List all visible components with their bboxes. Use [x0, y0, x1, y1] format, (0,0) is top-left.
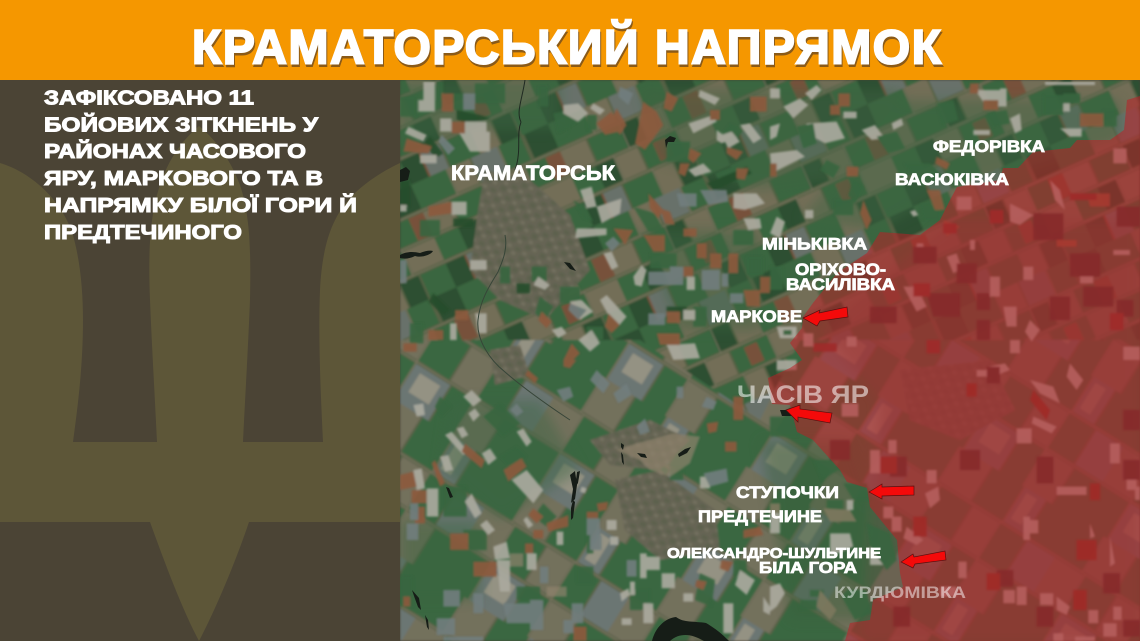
text block: summary: РАЙОНАХ ЧАСОВОГО [44, 139, 306, 163]
map: satellite terrain with occupied zone [400, 80, 1140, 641]
map labels: settlements: БІЛА ГОРА [759, 560, 858, 577]
terrain: broad colour patches [400, 80, 1140, 641]
terrain: fields east of the front line [770, 82, 1140, 360]
map labels: settlements: ВАСИЛІВКА [786, 276, 895, 294]
map labels: settlements: МАРКОВЕ [711, 308, 802, 326]
map labels: settlements [451, 138, 1045, 602]
map labels: settlements: МІНЬКІВКА [762, 236, 867, 254]
map labels: settlements: ОРІХОВО- [795, 261, 886, 279]
terrain: agricultural fields [400, 82, 1140, 641]
panel: left text panel [0, 80, 400, 641]
arrow: Біла Гора [901, 551, 946, 568]
icon: trident emblem [0, 126, 400, 641]
arrow: Часів Яр [786, 405, 832, 423]
text block: summary: ПРЕДТЕЧИНОГО [44, 222, 242, 244]
map labels: settlements: ФЕДОРІВКА [933, 138, 1045, 156]
terrain: patterned field base [400, 80, 1140, 641]
title: КРАМАТОРСЬКИЙ НАПРЯМОК [193, 22, 943, 77]
map labels: settlements: ОЛЕКСАНДРО-ШУЛЬТИНЕ [667, 545, 881, 562]
text block: summary: БОЙОВИХ ЗІТКНЕНЬ У [44, 112, 319, 136]
text block: summary: ЯРУ, МАРКОВОГО ТА В [44, 168, 323, 190]
map labels: settlements: ВАСЮКІВКА [895, 171, 1009, 189]
header band [0, 0, 1140, 80]
map labels: settlements: ПРЕДТЕЧИНЕ [698, 508, 822, 526]
text block: summary: НАПРЯМКУ БІЛОЇ ГОРИ Й [44, 193, 357, 217]
text block: summary: ЗАФІКСОВАНО 11 [44, 88, 254, 110]
map labels: settlements: КУРДЮМІВКА [834, 584, 966, 602]
arrow: Маркове [803, 307, 848, 326]
map labels: settlements: СТУПОЧКИ [736, 484, 839, 502]
map labels: settlements: КРАМАТОРСЬК [451, 162, 615, 185]
terrain: dimming veil [400, 80, 1140, 641]
terrain: rivers and ponds [400, 80, 794, 641]
occupied zone: red overlay [768, 96, 1140, 641]
text block: summary [44, 88, 357, 244]
arrow: Ступочки [869, 484, 914, 499]
map labels: settlements: ЧАСІВ ЯР [737, 381, 869, 409]
title: КРАМАТОРСЬКИЙ НАПРЯМОК [192, 20, 942, 74]
